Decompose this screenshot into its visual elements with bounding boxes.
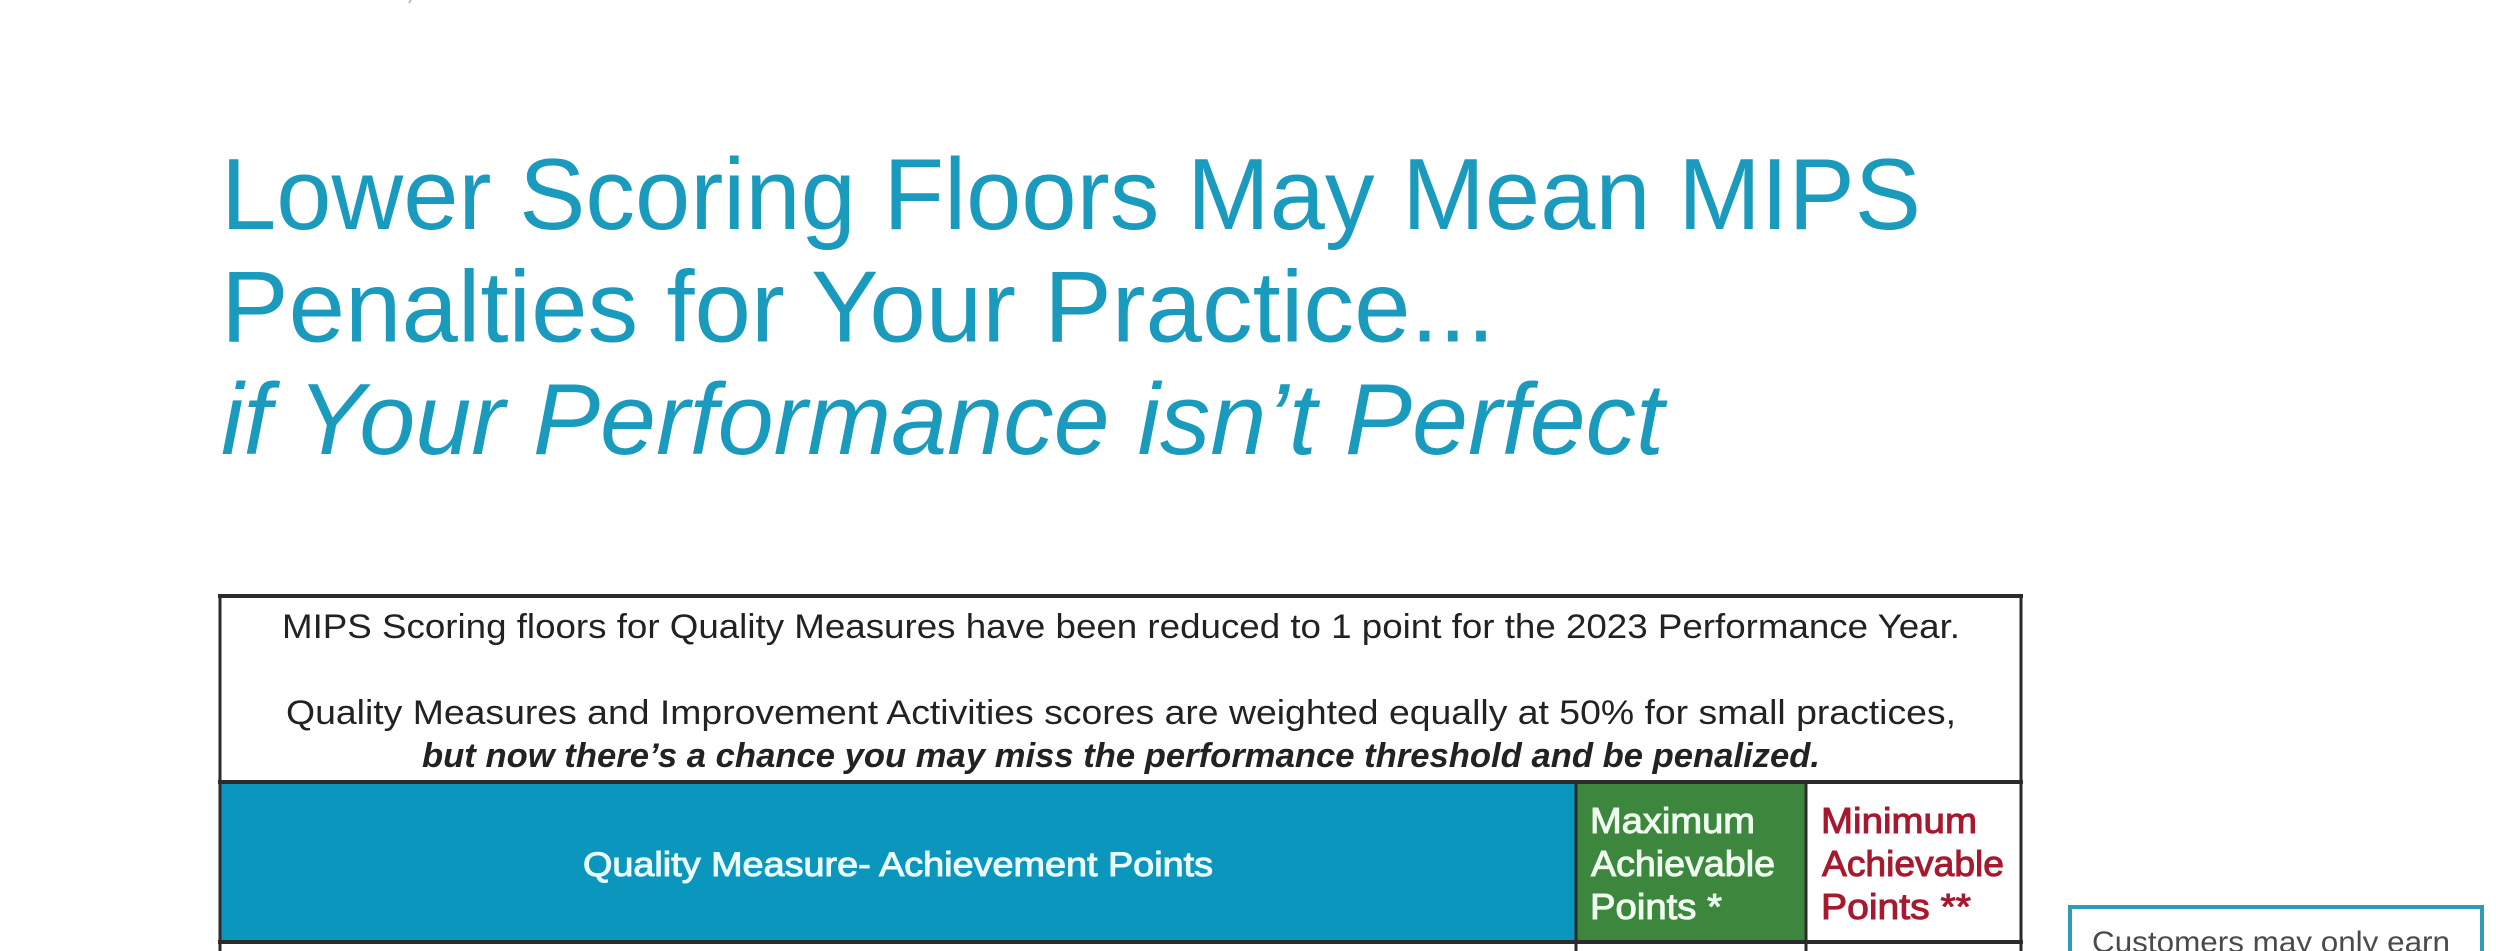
table grid lines — [218, 594, 2023, 951]
intro text — [282, 608, 1960, 775]
intro sentence 1: MIPS Scoring floors for Quality Measures have been reduced to 1 point for the 2023 Performance Year. — [282, 608, 1960, 646]
header cell: minimum points — [1806, 782, 2021, 942]
intro emphasis sentence: but now there’s a chance you may miss the performance threshold and be penalized. — [422, 737, 1820, 775]
callout: customer note — [2070, 907, 2482, 951]
header label: maximum achievable points — [1590, 800, 1775, 927]
header label: maximum achievable points: Maximum — [1590, 800, 1755, 841]
header label: maximum achievable points: Achievable — [1591, 843, 1775, 884]
clipped text remnant at top edge — [409, 0, 411, 3]
title line 1: Lower Scoring Floors May Mean MIPS — [221, 139, 1921, 251]
title — [221, 139, 1921, 476]
header label: maximum achievable points: Points * — [1590, 886, 1722, 927]
callout box — [2070, 907, 2482, 951]
intro sentence 2: Quality Measures and Improvement Activities scores are weighted equally at 50% for small practices, — [286, 694, 1956, 732]
title line 2: Penalties for Your Practice... — [221, 252, 1495, 364]
title line 3: if Your Performance isn’t Perfect — [221, 364, 1668, 476]
header label: minimum achievable points: Points ** — [1821, 886, 1971, 927]
header cell: quality measure — [220, 782, 1576, 942]
header label: minimum achievable points — [1821, 800, 2004, 927]
panel: scoring table — [218, 594, 2023, 951]
intro cell background — [220, 596, 2021, 782]
header label: minimum achievable points: Achievable — [1822, 843, 2004, 884]
header label: quality measure: Quality Measure- Achievement Points — [583, 846, 1213, 884]
header label: minimum achievable points: Minimum — [1821, 800, 1977, 841]
header cell: maximum points — [1576, 782, 1806, 942]
